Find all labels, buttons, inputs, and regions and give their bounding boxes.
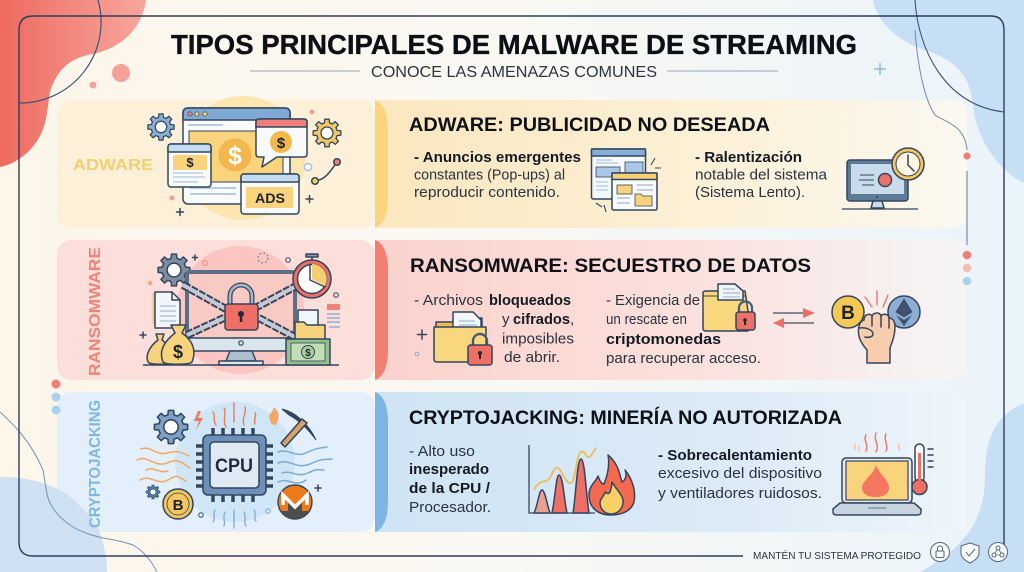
icon: fist with crypto coins xyxy=(832,291,920,363)
cryptojacking illustration: B xyxy=(173,497,184,514)
adware bullet 2 text xyxy=(695,149,828,201)
cryptojacking bullet 1 text: inesperado xyxy=(409,461,489,478)
icon: shield xyxy=(961,543,979,563)
adware illustration: $ xyxy=(277,135,286,152)
cryptojacking background xyxy=(57,392,967,532)
cryptojacking bullet 2 text xyxy=(658,447,822,502)
ransomware bullet 1 text: bloqueados xyxy=(489,292,571,309)
adware background xyxy=(57,100,967,228)
cryptojacking bullet 2 text: excesivo del dispositivo xyxy=(658,465,822,482)
ransomware illustration: $ xyxy=(305,348,311,359)
ransomware illustration: $ xyxy=(173,342,183,362)
cryptojacking illustration xyxy=(137,402,332,528)
adware bullet 2 text: notable del sistema xyxy=(695,166,828,184)
adware illustration: ADS xyxy=(255,190,285,206)
ransomware bullet 1 text: cifrados xyxy=(513,311,570,328)
decoration: top-left red blob xyxy=(0,0,146,167)
footer xyxy=(753,542,1008,563)
ransomware bullet 2 text: criptomonedas xyxy=(606,331,721,348)
panel: cryptojacking xyxy=(0,392,967,572)
decoration: top-right blue blob xyxy=(873,0,1024,183)
icon: folder with padlock xyxy=(703,284,755,331)
ransomware label: RANSOMWARE xyxy=(87,247,104,376)
cryptojacking heading: CRYPTOJACKING: MINERÍA NO AUTORIZADA xyxy=(409,406,842,429)
adware bullet 1 text: reproducir contenido. xyxy=(414,184,560,201)
icon: lock xyxy=(930,542,950,562)
cryptojacking bullet 2 text: y ventiladores ruidosos. xyxy=(658,485,822,502)
adware bullet 1 text: - Anuncios emergentes xyxy=(414,149,581,166)
adware illustration: $ xyxy=(186,155,194,170)
cryptojacking bullet 1 text xyxy=(409,443,491,516)
adware label: ADWARE xyxy=(73,157,153,174)
ransomware bullet 1 text: , xyxy=(570,311,574,328)
decoration: bottom-left blue blob xyxy=(0,477,107,572)
ransomware bullet 1 text: de abrir. xyxy=(504,349,560,366)
cryptojacking label: CRYPTOJACKING xyxy=(87,400,104,528)
adware bullet 1 text xyxy=(414,149,581,201)
ransomware bullet 2 text: para recuperar acceso. xyxy=(606,350,761,367)
icon: network xyxy=(988,542,1008,562)
panel: adware xyxy=(57,96,967,228)
ransomware illustration xyxy=(140,246,340,374)
ransomware bullet 2 text xyxy=(606,292,761,367)
chart: CPU usage spikes with flame xyxy=(529,445,635,515)
cryptojacking bullet 1 text: de la CPU / xyxy=(409,480,491,497)
ransomware bullet 2 text: un rescate en xyxy=(606,311,687,328)
ransomware background xyxy=(57,240,967,380)
adware bullet 1 text: constantes (Pop-ups) al xyxy=(414,166,565,184)
ransomware heading: RANSOMWARE: SECUESTRO DE DATOS xyxy=(410,255,811,277)
ransomware bullet 1 text: y xyxy=(502,311,510,328)
cryptojacking bullet 2 text: - Sobrecalentamiento xyxy=(658,447,812,464)
ransomware bullet 1 text xyxy=(414,292,574,366)
icon: pop-up windows xyxy=(592,149,661,212)
cryptojacking bullet 1 text: Procesador. xyxy=(409,499,491,516)
cryptojacking illustration: CPU xyxy=(215,456,253,477)
title: TIPOS PRINCIPALES DE MALWARE DE STREAMING xyxy=(171,29,857,60)
subtitle: CONOCE LAS AMENAZAS COMUNES xyxy=(371,64,657,81)
adware illustration: $ xyxy=(228,142,242,170)
cryptojacking bullet 1 text: - Alto uso xyxy=(409,443,475,460)
adware heading: ADWARE: PUBLICIDAD NO DESEADA xyxy=(409,114,770,136)
icon: fist with crypto coins: B xyxy=(841,303,855,324)
arrows: exchange xyxy=(773,308,815,328)
icon: slow computer with clock xyxy=(842,148,924,209)
panel: ransomware xyxy=(57,240,967,380)
footer text: MANTÉN TU SISTEMA PROTEGIDO xyxy=(753,549,921,562)
adware illustration xyxy=(148,96,341,220)
adware bullet 2 text: - Ralentización xyxy=(695,149,802,166)
ransomware bullet 1 text: imposibles xyxy=(502,330,574,348)
decoration: bottom-right blue blob xyxy=(920,403,1024,572)
ransomware bullet 1 text: - Archivos xyxy=(414,292,483,309)
icon: locked folder xyxy=(415,312,492,365)
ransomware bullet 2 text: - Exigencia de xyxy=(606,292,700,309)
icon: overheating laptop xyxy=(833,433,933,515)
adware bullet 2 text: (Sistema Lento). xyxy=(695,184,805,201)
